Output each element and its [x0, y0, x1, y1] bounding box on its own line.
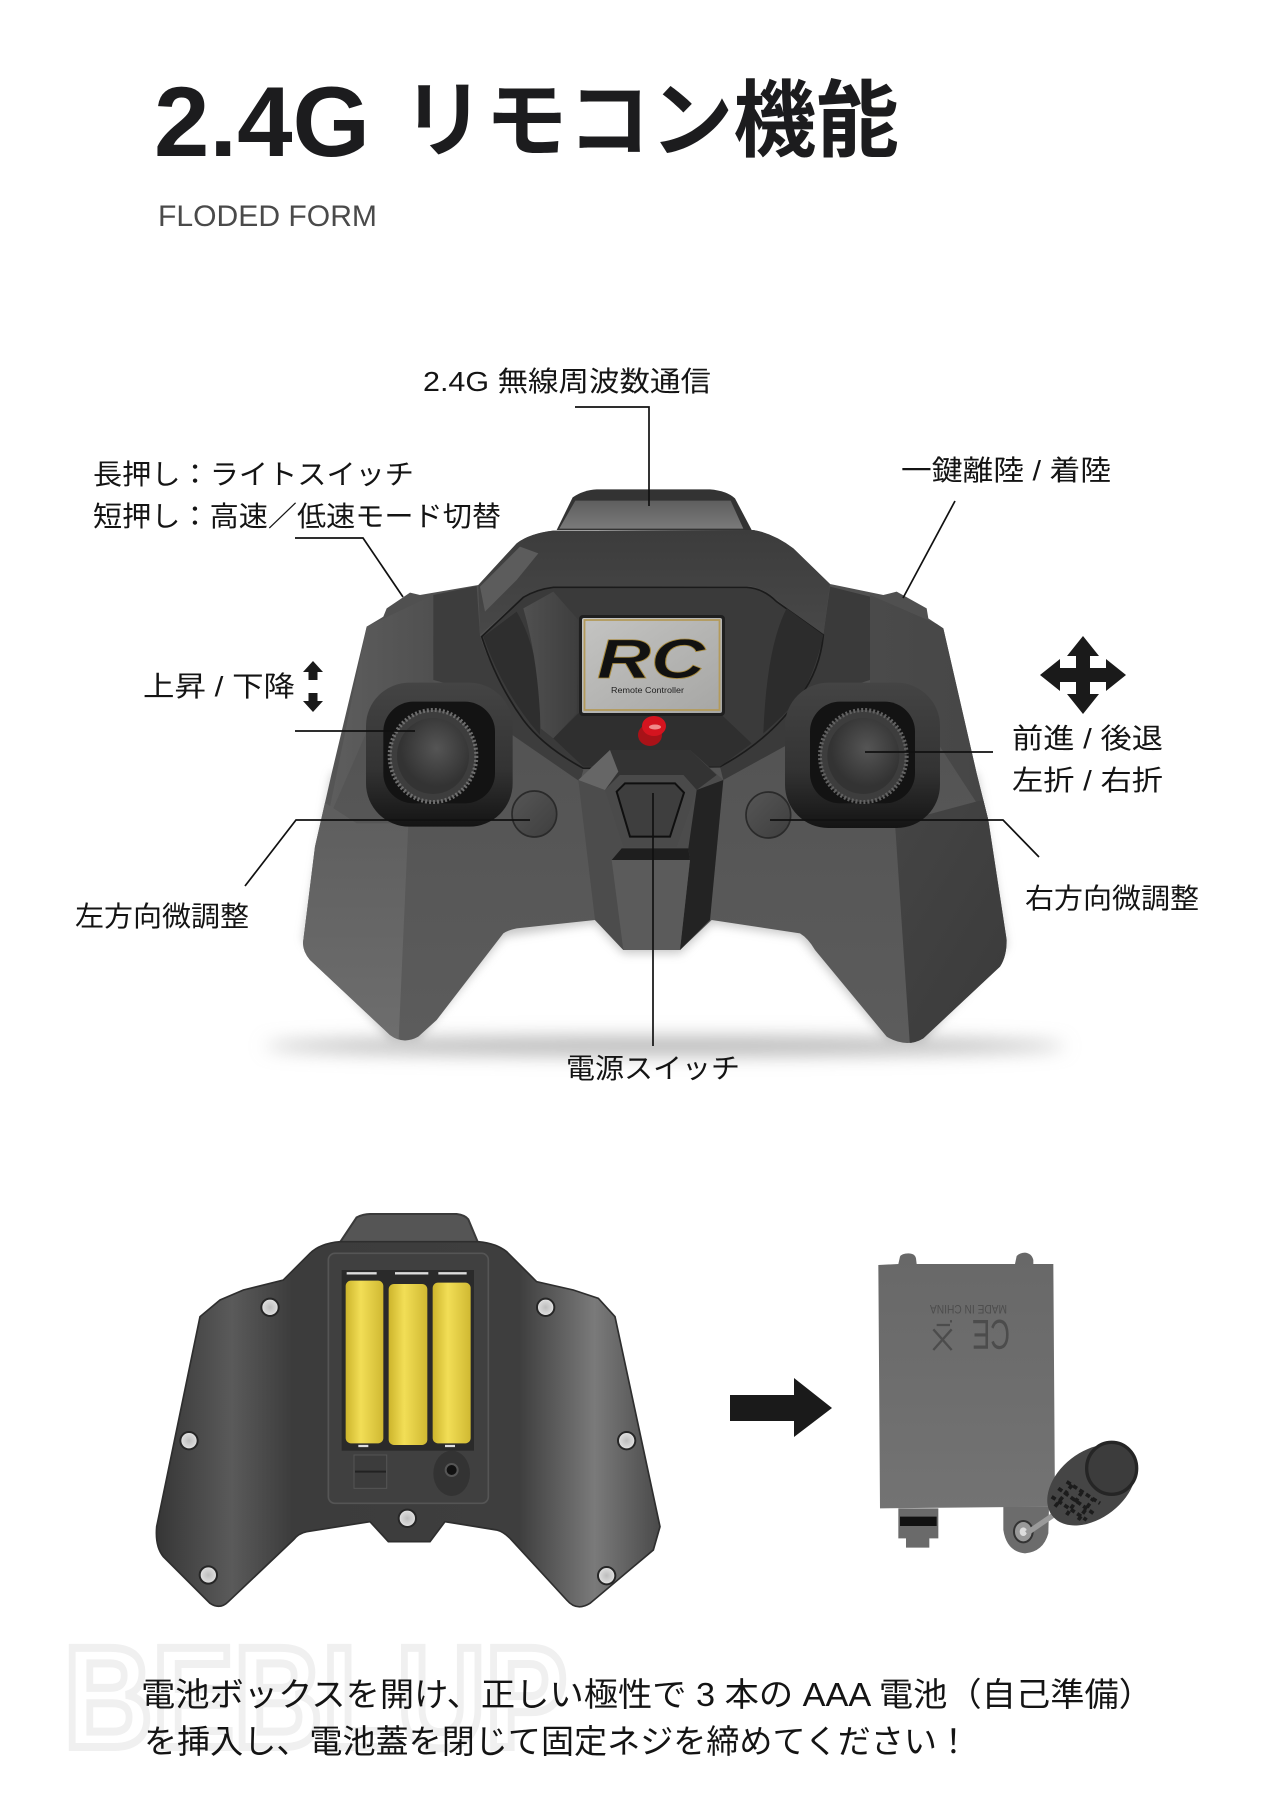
left inner facet	[483, 612, 540, 735]
left dark strip	[433, 586, 583, 782]
left stick cap	[397, 718, 469, 794]
right dark facet	[763, 608, 823, 733]
title	[154, 66, 899, 177]
controller ground shadow	[265, 1037, 1065, 1055]
upper right outer panel	[870, 618, 988, 818]
contact strips	[347, 1273, 467, 1446]
tool grip	[1032, 1428, 1152, 1542]
lid markings	[930, 1302, 1010, 1358]
back shell	[156, 1242, 660, 1607]
left stick housing	[366, 683, 513, 827]
controller back view with batteries	[156, 1214, 660, 1607]
right stick housing	[785, 683, 940, 828]
left light facet	[523, 592, 578, 738]
joystick head	[1087, 1442, 1137, 1494]
switch button	[617, 783, 684, 837]
battery lid and tool	[878, 1253, 1152, 1553]
label: long press: 長押し：ライトスイッチ	[93, 459, 414, 490]
shell highlight	[480, 547, 538, 612]
upper shell	[478, 530, 830, 635]
tether screw	[1014, 1521, 1033, 1542]
lid screw post	[433, 1451, 470, 1496]
arrow to lid	[730, 1378, 832, 1437]
left trim button	[512, 791, 557, 837]
battery 3	[433, 1283, 471, 1443]
handle top	[339, 1214, 478, 1243]
RC nameplate	[579, 615, 725, 716]
switch stem	[612, 860, 690, 950]
switch dark band	[612, 848, 690, 860]
instructions line 1: 電池ボックスを開け、正しい極性で 3 本の AAA 電池（自己準備）	[141, 1676, 1153, 1713]
controller front view	[290, 489, 1057, 1053]
label: radio frequency: 2.4G 無線周波数通信	[423, 366, 711, 397]
switch dark side	[680, 780, 723, 950]
main body	[303, 530, 1007, 1043]
body facets	[303, 586, 1007, 1043]
label: takeoff landing: 一鍵離陸 / 着陸	[901, 455, 1111, 486]
subtitle: FLODED FORM	[158, 200, 377, 233]
right stick knurled ring	[820, 710, 907, 802]
lid markings: MADE IN CHINA	[930, 1302, 1007, 1315]
body soft shadow	[303, 773, 1007, 1042]
right stick cap	[827, 718, 899, 794]
label: forward backward: 前進 / 後退	[1012, 723, 1163, 754]
antenna handle	[557, 489, 752, 530]
instructions line 2: を挿入し、電池蓋を閉じて固定ネジを締めてください！	[144, 1723, 970, 1760]
RC logo: RC	[597, 627, 707, 690]
strap base	[1003, 1507, 1049, 1553]
plate caption: Remote Controller	[611, 686, 684, 695]
switch top face	[605, 750, 717, 790]
power slider slot	[354, 1455, 387, 1488]
battery 2	[389, 1284, 427, 1445]
battery 1	[346, 1281, 383, 1443]
right dark strip	[720, 587, 870, 780]
title: リモコン機能	[402, 74, 899, 168]
switch button surround	[605, 775, 697, 847]
battery compartment	[342, 1270, 474, 1451]
lower left lobe	[303, 803, 408, 1040]
callout leader lines	[245, 407, 1039, 1046]
power switch module	[578, 750, 723, 950]
switch light facet	[578, 750, 618, 790]
lower right lobe	[896, 800, 1007, 1043]
label: right trim: 右方向微調整	[1025, 883, 1199, 914]
case screws	[180, 1299, 635, 1584]
label: left right turn: 左折 / 右折	[1012, 765, 1163, 796]
tool shaft	[1027, 1512, 1058, 1533]
icon: four-way arrows	[1040, 636, 1126, 714]
lid markings: CE	[972, 1311, 1010, 1358]
left stick knurled ring	[390, 710, 476, 802]
red LED	[638, 716, 666, 746]
battery bay recess	[328, 1253, 488, 1503]
watermark: BEBLUP	[64, 1617, 567, 1778]
battery lid	[878, 1253, 1055, 1508]
inner faceplate	[482, 587, 823, 768]
lid clip	[898, 1508, 938, 1548]
label: left trim: 左方向微調整	[75, 901, 249, 932]
title: 2.4G	[154, 66, 370, 177]
label: power switch: 電源スイッチ	[566, 1053, 740, 1084]
grip texture	[1052, 1482, 1100, 1520]
label: short press: 短押し：高速／低速モード切替	[93, 501, 501, 532]
recycling mark	[933, 1321, 952, 1350]
icon: up down arrows	[303, 661, 323, 712]
lower face under plate	[553, 713, 752, 767]
label: ascend descend: 上昇 / 下降	[143, 671, 295, 702]
upper left outer panel	[352, 626, 368, 697]
right trim button	[746, 792, 791, 838]
